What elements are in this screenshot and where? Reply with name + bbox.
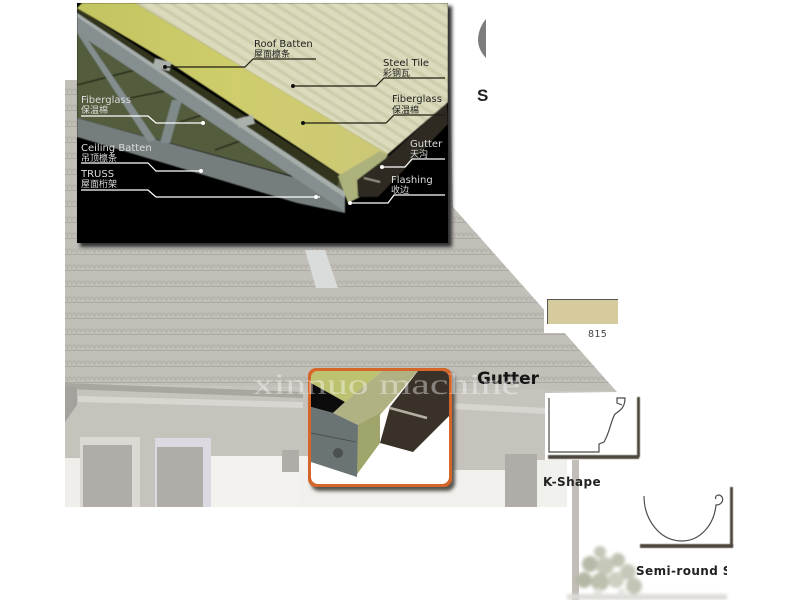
yellow fiberglass end <box>311 371 382 402</box>
gutter detail inset <box>308 368 455 491</box>
batten clips <box>153 58 172 71</box>
flashing top face <box>333 371 418 427</box>
label: roof batten: 屋面檩条 <box>254 48 290 60</box>
label: flashing: Flashing <box>391 175 433 186</box>
label: steel tile: Steel Tile <box>383 58 429 69</box>
label: ceiling batten: 吊顶檩条 <box>81 152 117 164</box>
label: steel tile: 彩钢瓦 <box>383 67 410 79</box>
label: fiberglass left <box>81 95 131 116</box>
label: fiberglass right <box>392 94 442 116</box>
label: truss <box>80 169 117 190</box>
skylight <box>305 250 338 288</box>
leader lines <box>81 59 445 203</box>
panel: roof cross-section <box>77 3 452 247</box>
clipped heading: S <box>477 86 488 105</box>
downspout <box>572 460 579 600</box>
colour swatch 815: 815 <box>588 329 607 340</box>
truss upper chord <box>77 17 345 212</box>
label: truss: TRUSS <box>80 169 114 180</box>
label: steel tile <box>383 58 429 79</box>
ceiling fiberglass <box>77 33 344 192</box>
label: gutter: Gutter <box>410 139 443 150</box>
semi-round gutter profile <box>640 487 733 548</box>
label: fiberglass right: Fiberglass <box>392 94 442 105</box>
gutter <box>357 103 448 197</box>
flashing end <box>338 151 388 203</box>
house wall <box>65 384 617 507</box>
flashing front face <box>355 413 380 477</box>
label: truss: 屋面桁架 <box>81 178 117 190</box>
label: fiberglass left: 保温棉 <box>81 104 108 116</box>
bush <box>567 546 727 600</box>
label: gutter <box>410 139 443 160</box>
label: roof batten <box>254 39 313 60</box>
fiberglass layer <box>77 3 388 175</box>
icon: clipped circle <box>478 19 486 58</box>
semi-round label: Semi-round S <box>636 564 732 578</box>
pale ground right of the wall <box>537 460 567 507</box>
watermark: xinnuo machine <box>253 368 520 401</box>
truss end <box>311 407 358 477</box>
gutter body <box>380 371 449 452</box>
label: ceiling batten: Ceiling Batten <box>81 143 152 154</box>
colour swatch 815 <box>544 297 618 340</box>
steel tile <box>135 3 448 154</box>
label: fiberglass right: 保温棉 <box>392 104 419 116</box>
label: flashing: 收边 <box>391 184 409 196</box>
k-shape gutter profile <box>545 393 640 459</box>
background: house illustration <box>65 80 727 600</box>
house windows <box>65 437 537 507</box>
black cavity <box>311 383 345 413</box>
label: fiberglass left: Fiberglass <box>81 95 131 106</box>
gutter heading: Gutter <box>477 369 540 389</box>
label: gutter: 天沟 <box>410 148 428 160</box>
roof of house <box>65 80 617 392</box>
label: roof batten: Roof Batten <box>254 39 313 50</box>
truss lower chord <box>77 118 345 213</box>
k-shape label: K-Shape <box>543 475 601 489</box>
truss web members <box>77 33 156 142</box>
label: ceiling batten <box>81 143 152 164</box>
label: flashing <box>391 175 433 196</box>
eave highlight <box>452 403 545 414</box>
